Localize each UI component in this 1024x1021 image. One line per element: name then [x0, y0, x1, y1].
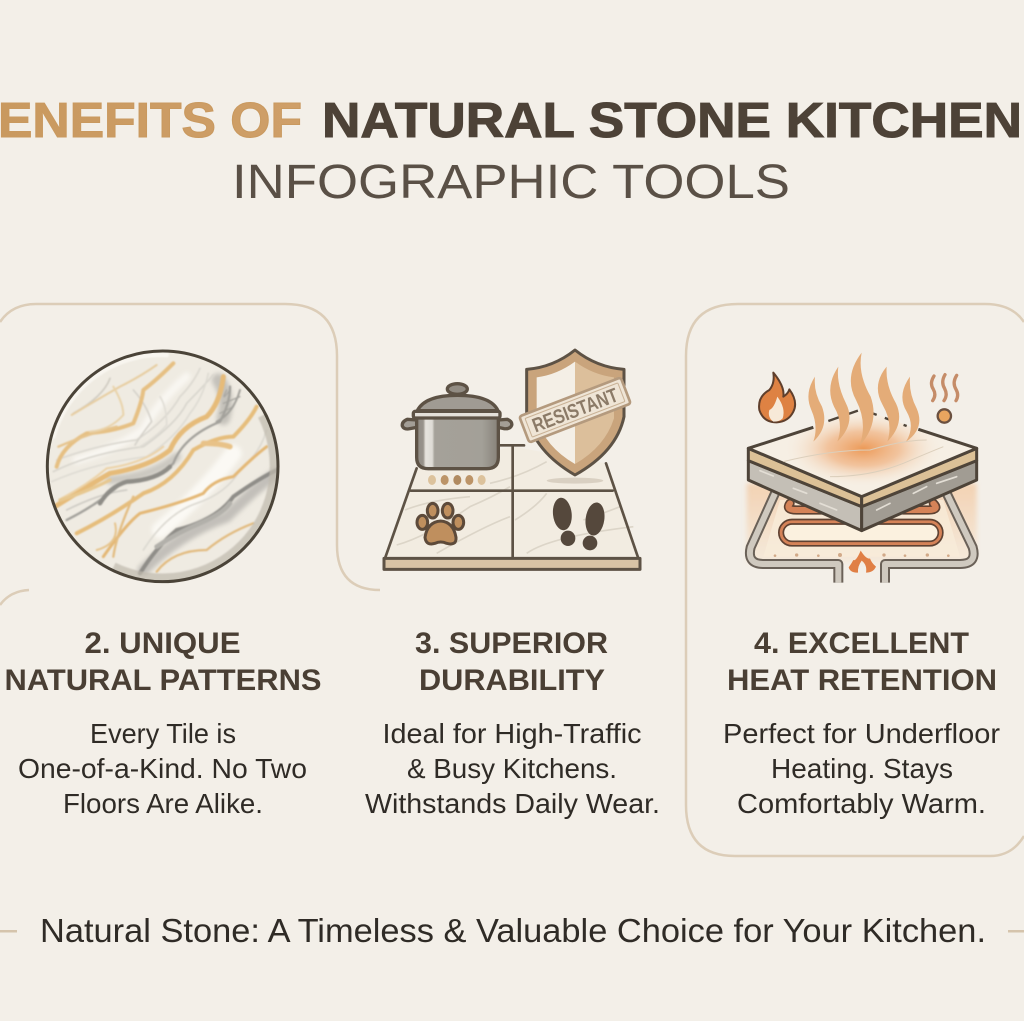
text: superior durability description: Withstands Daily Wear.: [365, 788, 660, 819]
footer dash right: [1008, 930, 1024, 932]
icon: burner flames: [428, 475, 486, 485]
pale parallel bands: [53, 375, 213, 472]
icon: resistant stamp: RESISTANT: [529, 385, 621, 437]
title line one: NATURAL STONE KITCHEN: [322, 94, 1022, 148]
heading: superior durability: [415, 627, 608, 697]
footer tagline: Natural Stone: A Timeless & Valuable Choice for Your Kitchen.: [40, 912, 986, 949]
stone speckle: [760, 471, 957, 510]
text: superior durability description: & Busy Kitchens.: [407, 753, 617, 784]
icon: marble disc: [47, 351, 278, 582]
panel outline: small corner arc: [0, 590, 29, 605]
heading: superior durability: DURABILITY: [419, 664, 605, 697]
icon: paw print: [417, 503, 464, 544]
icon: footprints: [551, 497, 607, 550]
text: excellent heat retention description: Heating. Stays: [771, 753, 953, 784]
icon: flame: [759, 373, 795, 422]
subtitle: INFOGRAPHIC TOOLS: [232, 156, 790, 209]
icon: shield: [527, 350, 624, 484]
panel outline: unique natural patterns: [0, 304, 380, 590]
heading: excellent heat retention: HEAT RETENTION: [727, 664, 997, 697]
icon: pot: [402, 384, 512, 469]
icon: durability pot, shield and floor tiles: [384, 350, 640, 569]
small flame below slab: [849, 551, 876, 573]
heading: superior durability: 3. SUPERIOR: [415, 627, 608, 660]
heading: unique natural patterns: 2. UNIQUE: [84, 627, 240, 660]
text: unique natural patterns description: [18, 718, 307, 819]
rising heat waves: [808, 353, 919, 446]
marble veins on slab: [783, 440, 943, 477]
heading: unique natural patterns: NATURAL PATTERNS: [4, 664, 322, 697]
footer dash left: [0, 930, 17, 932]
icon: heat retention slab: [747, 353, 977, 583]
text: superior durability description: [365, 718, 660, 819]
heat glow: [747, 483, 977, 563]
heading: unique natural patterns: [4, 627, 322, 697]
title: [0, 94, 1022, 209]
text: excellent heat retention description: Perfect for Underfloor: [723, 718, 1000, 749]
text: superior durability description: Ideal for High-Traffic: [382, 718, 642, 749]
icon: small steam and dot: [931, 375, 958, 423]
gold veins: [57, 363, 173, 467]
text: unique natural patterns description: One-of-a-Kind. No Two: [18, 753, 307, 784]
heading: excellent heat retention: [727, 627, 997, 697]
floor tiles: [384, 445, 640, 569]
text: unique natural patterns description: Every Tile is: [90, 718, 236, 749]
text: unique natural patterns description: Floors Are Alike.: [63, 788, 263, 819]
title line one: [0, 94, 1022, 148]
text: excellent heat retention description: [723, 718, 1000, 819]
text: excellent heat retention description: Comfortably Warm.: [737, 788, 986, 819]
panel outline: excellent heat retention: [686, 304, 1024, 856]
stone slab: [748, 408, 977, 531]
heading: excellent heat retention: 4. EXCELLENT: [754, 627, 969, 660]
heating dots: [774, 553, 950, 557]
title line one: ENEFITS OF: [0, 94, 302, 148]
underfloor pipes: [750, 493, 974, 583]
